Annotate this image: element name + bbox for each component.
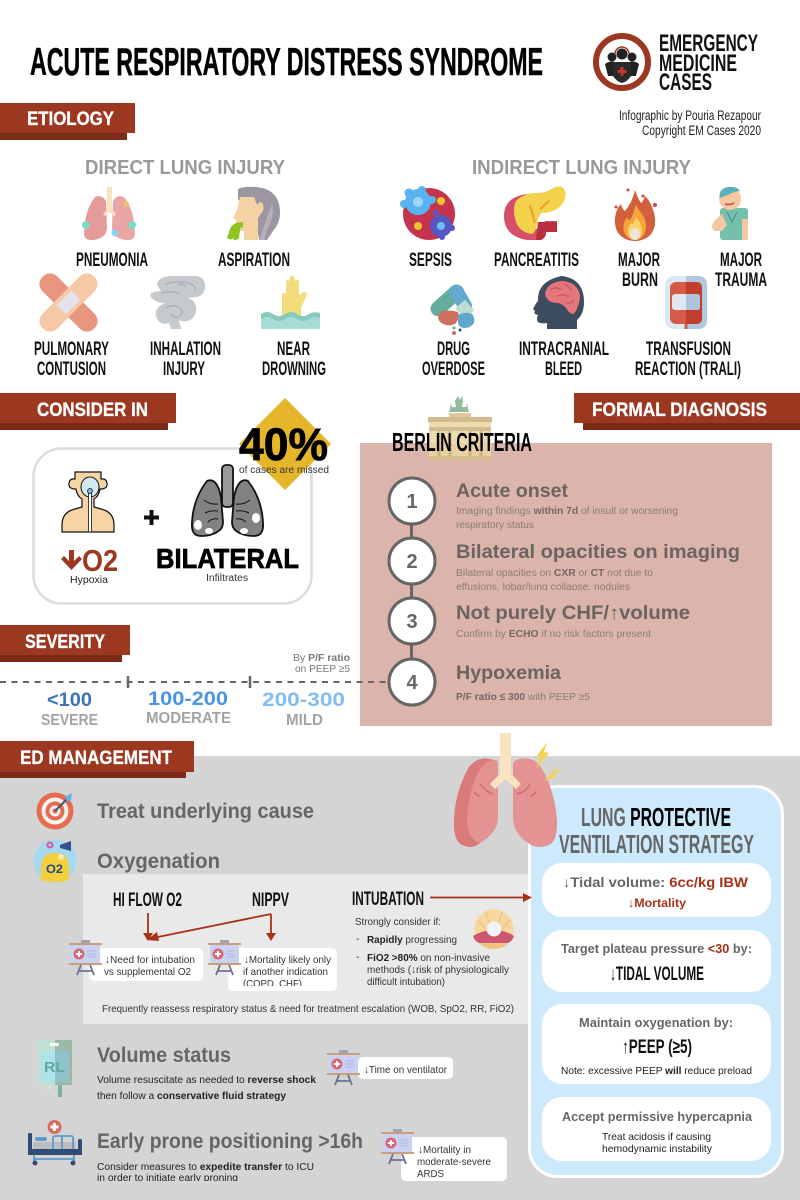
label: intubation: INTUBATION (352, 889, 424, 910)
card: permissive hypercapnia: Treat acidosis if causing (602, 1131, 711, 1143)
heading: lung protective: LUNG PROTECTIVE (581, 802, 731, 832)
severity scale (0, 676, 388, 729)
heading: berlin criteria: BERLIN CRITERIA (392, 427, 532, 457)
labels: direct row two: CONTUSION (37, 359, 106, 380)
severity: severe (41, 690, 98, 729)
labels: sepsis, pancreatitis, burn, trauma: BURN (622, 270, 658, 291)
icon: brandenburg gate (428, 396, 492, 460)
callout: 40% of cases are missed: 40% (239, 419, 328, 470)
text block: volume status: then follow a conservative fluid strategy (97, 1090, 286, 1102)
text: intubation indications: methods (↓risk of physiologically (367, 964, 510, 976)
icon: lightning bolts (536, 742, 563, 781)
callout: mortality in ARDS: ↓Mortality in (418, 1144, 471, 1156)
icon: injured lungs (454, 733, 563, 847)
labels: indirect row two (422, 339, 741, 380)
labels: direct row two: DROWNING (262, 359, 326, 380)
icon: major burn (614, 188, 657, 241)
credit text: Copyright EM Cases 2020 (642, 123, 761, 138)
text: low oxygen: Hypoxia (70, 574, 108, 586)
label: NIPPV: NIPPV (252, 890, 289, 911)
text: by P/F ratio on PEEP: By P/F ratio (293, 652, 350, 664)
banner: etiology (0, 103, 135, 140)
banner: formal diagnosis: FORMAL DIAGNOSIS (592, 400, 767, 421)
labels: sepsis, pancreatitis, burn, trauma (409, 250, 767, 291)
icon: pancreatitis (504, 186, 566, 240)
text block: volume status: Volume resuscitate as needed to reverse shock (97, 1074, 316, 1086)
text: bilateral infiltrates: BILATERAL (156, 543, 299, 574)
card: plateau pressure (542, 930, 771, 992)
text: bilateral infiltrates: Infiltrates (206, 573, 248, 584)
icon: oxygen tank: O2 (46, 864, 63, 876)
text block: early prone positioning (97, 1130, 363, 1185)
heading: indirect lung injury: INDIRECT LUNG INJURY (472, 157, 692, 179)
text: intubation indications: difficult intubation) (367, 976, 445, 988)
banner: consider in: CONSIDER IN (37, 400, 148, 421)
callout: mortality in ARDS (401, 1137, 507, 1181)
callout: hi flow evidence: ↓Need for intubation (105, 954, 195, 966)
text block: early prone positioning: Consider measures to expedite transfer to ICU (97, 1161, 314, 1173)
text: intubation indications: FiO2 >80% on non-invasive (367, 952, 490, 964)
severity: mild (262, 690, 345, 729)
step 1: acute onset: Acute onset (456, 481, 569, 502)
text: intubation indications: - (356, 933, 360, 945)
text block: early prone positioning: in order to initiate early proning (97, 1172, 238, 1184)
labels: direct row two: INJURY (163, 359, 205, 380)
panel: consider in (34, 448, 312, 604)
callout: time on ventilator (358, 1057, 453, 1079)
banner: ED management (0, 741, 194, 778)
card: plateau pressure: ↓TIDAL VOLUME (610, 964, 704, 985)
icon: transfusion blood bag (665, 276, 707, 329)
icon: presentation board (208, 940, 241, 975)
panel: oxygenation options (69, 874, 530, 1024)
text: by P/F ratio on PEEP: on PEEP ≥5 (295, 663, 350, 675)
card: maintain oxygenation: Note: excessive PEEP will reduce preload (561, 1065, 752, 1077)
banner: ED management: ED MANAGEMENT (20, 748, 172, 769)
icon: presentation board (381, 1129, 414, 1164)
note: reassess: Frequently reassess respiratory status & need for treatment escalation (WOB, SpO2, RR, FiO2) (102, 1003, 514, 1015)
credit text (619, 108, 761, 138)
card: maintain oxygenation (542, 1004, 771, 1084)
step 2: bilateral opacities (389, 538, 740, 594)
icon: intracranial bleed head (533, 276, 584, 329)
labels: indirect row two: INTRACRANIAL (519, 339, 609, 360)
heading: oxygenation: Oxygenation (97, 850, 220, 873)
icon: plus (144, 510, 159, 525)
callout: NIPPV evidence (228, 948, 337, 991)
labels: sepsis, pancreatitis, burn, trauma: TRAUMA (715, 270, 767, 291)
banner: severity: SEVERITY (25, 632, 105, 653)
icon: sepsis (400, 186, 455, 240)
step 3: not purely CHF: 3 (406, 611, 418, 633)
step 1: acute onset: respiratory status (456, 519, 534, 531)
callout: NIPPV evidence: if another indication (243, 966, 328, 978)
callout: 40% of cases are missed (239, 398, 331, 490)
icon: presentation board (327, 1050, 360, 1085)
callout: NIPPV evidence: (COPD, CHF) (243, 978, 302, 990)
step 4: hypoxemia: Hypoxemia (456, 663, 561, 684)
labels: direct row two: NEAR (277, 339, 310, 360)
step 2: bilateral opacities: Bilateral opacities on imaging (456, 542, 740, 563)
text: intubation indications (355, 916, 510, 988)
card: permissive hypercapnia: hemodynamic instability (602, 1143, 713, 1155)
text block: volume status: Volume status (97, 1044, 231, 1067)
step 1: acute onset: Imaging findings within 7d of insult or worsening (456, 505, 678, 517)
labels: direct row two: INHALATION (150, 339, 221, 360)
icon: pearl in shell (473, 909, 514, 949)
callout: NIPPV evidence: ↓Mortality likely only (244, 954, 332, 966)
labels: sepsis, pancreatitis, burn, trauma: PANCREATITIS (494, 250, 579, 271)
card: maintain oxygenation: Maintain oxygenation by: (579, 1016, 733, 1030)
step 3: not purely CHF: Not purely CHF/↑volume (456, 603, 690, 624)
panel: lung protective ventilation strategy (530, 786, 782, 1176)
logo: Emergency Medicine Cases: MEDICINE (659, 50, 737, 77)
callout: hi flow evidence: vs supplemental O2 (104, 966, 191, 978)
step 3: not purely CHF: Confirm by ECHO if no risk factors present (456, 628, 651, 640)
severity: mild: MILD (286, 712, 323, 729)
severity: mild: 200-300 (262, 690, 345, 711)
heading: treat underlying cause: Treat underlying cause (97, 800, 314, 823)
heading: direct lung injury: DIRECT LUNG INJURY (85, 157, 286, 179)
labels: sepsis, pancreatitis, burn, trauma: MAJOR (720, 250, 762, 271)
panel: formal diagnosis berlin criteria (360, 396, 772, 726)
text: low oxygen (61, 543, 118, 586)
step 2: bilateral opacities: 2 (406, 551, 418, 573)
card: plateau pressure: Target plateau pressure <30 by: (561, 942, 752, 956)
callout: mortality in ARDS: moderate-severe (417, 1156, 491, 1168)
arrows: from hi flow and NIPPV (143, 913, 276, 941)
arrow: intubation to ventilation strategy (430, 893, 532, 902)
callout: hi flow evidence (89, 948, 203, 981)
connector between steps (410, 520, 413, 665)
labels: direct row two (34, 339, 326, 380)
text: low oxygen: O2 (82, 543, 118, 578)
icon: major trauma (712, 187, 748, 240)
step 3: not purely CHF (389, 598, 690, 644)
severity: moderate (146, 689, 231, 727)
card: permissive hypercapnia (542, 1097, 771, 1161)
label: pneumonia: PNEUMONIA (76, 250, 148, 271)
banner: formal diagnosis (574, 393, 800, 430)
text: by P/F ratio on PEEP (293, 652, 350, 675)
icon: Ringer's lactate bag: RL (44, 1059, 65, 1076)
logo: Emergency Medicine Cases (596, 30, 758, 96)
icon: pneumonia lungs (82, 187, 136, 240)
step 4: hypoxemia (389, 659, 590, 705)
icon: presentation board (69, 940, 102, 975)
icon: patient with oxygen mask (62, 472, 114, 532)
icon: target (36, 792, 74, 830)
icon: drug overdose capsules (427, 281, 475, 335)
icon: oxygen tank (34, 840, 76, 882)
text: intubation indications: - (356, 951, 360, 963)
label: aspiration: ASPIRATION (218, 250, 290, 271)
label: hi flow O2: HI FLOW O2 (113, 890, 182, 911)
severity: moderate: 100-200 (148, 689, 228, 710)
text block: volume status (97, 1044, 316, 1102)
callout: mortality in ARDS: ARDS (417, 1168, 444, 1180)
card: tidal volume (542, 863, 771, 917)
step 4: hypoxemia: 4 (406, 672, 418, 694)
banner: consider in (0, 393, 176, 430)
labels: indirect row two: TRANSFUSION (646, 339, 731, 360)
icon: inhalation smoke (150, 276, 205, 329)
banner: severity (0, 625, 130, 662)
panel: ED management background (0, 733, 800, 1200)
callout: 40% of cases are missed: of cases are missed (239, 464, 329, 476)
labels: indirect row two: OVERDOSE (422, 359, 485, 380)
severity: severe: <100 (47, 690, 92, 711)
card: tidal volume: ↓Tidal volume: 6cc/kg IBW (563, 874, 749, 890)
labels: indirect row two: BLEED (545, 359, 582, 380)
icon: near drowning hand (261, 276, 320, 329)
labels: sepsis, pancreatitis, burn, trauma: MAJOR (618, 250, 660, 271)
icon: aspiration (227, 187, 280, 240)
step 1: acute onset: 1 (406, 491, 418, 513)
card: permissive hypercapnia: Accept permissive hypercapnia (562, 1110, 753, 1124)
text: intubation indications: Strongly consider if: (355, 916, 441, 928)
severity: moderate: MODERATE (146, 710, 231, 727)
step 2: bilateral opacities: effusions, lobar/lung collapse, nodules (456, 581, 630, 593)
labels: direct row two: PULMONARY (34, 339, 109, 360)
logo: Emergency Medicine Cases: CASES (659, 69, 712, 96)
step 4: hypoxemia: P/F ratio ≤ 300 with PEEP ≥5 (456, 691, 590, 703)
icon: hospital bed (28, 1120, 82, 1166)
icon: Ringer's lactate bag (38, 1040, 72, 1097)
step 2: bilateral opacities: Bilateral opacities on CXR or CT not due to (456, 567, 653, 579)
callout: time on ventilator: ↓Time on ventilator (364, 1064, 447, 1076)
icon: pulmonary contusion bandage (35, 269, 102, 336)
step 1: acute onset (389, 478, 678, 531)
card: tidal volume: ↓Mortality (628, 896, 686, 910)
card: maintain oxygenation: ↑PEEP (≥5) (622, 1037, 692, 1058)
banner: etiology: ETIOLOGY (27, 109, 114, 130)
labels: indirect row two: DRUG (437, 339, 470, 360)
severity: severe: SEVERE (41, 712, 98, 729)
text block: early prone positioning: Early prone positioning >16h (97, 1130, 363, 1153)
icon: bilateral infiltrate lungs (192, 465, 263, 536)
labels: sepsis, pancreatitis, burn, trauma: SEPSIS (409, 250, 452, 271)
text: intubation indications: Rapidly progressing (367, 934, 457, 946)
